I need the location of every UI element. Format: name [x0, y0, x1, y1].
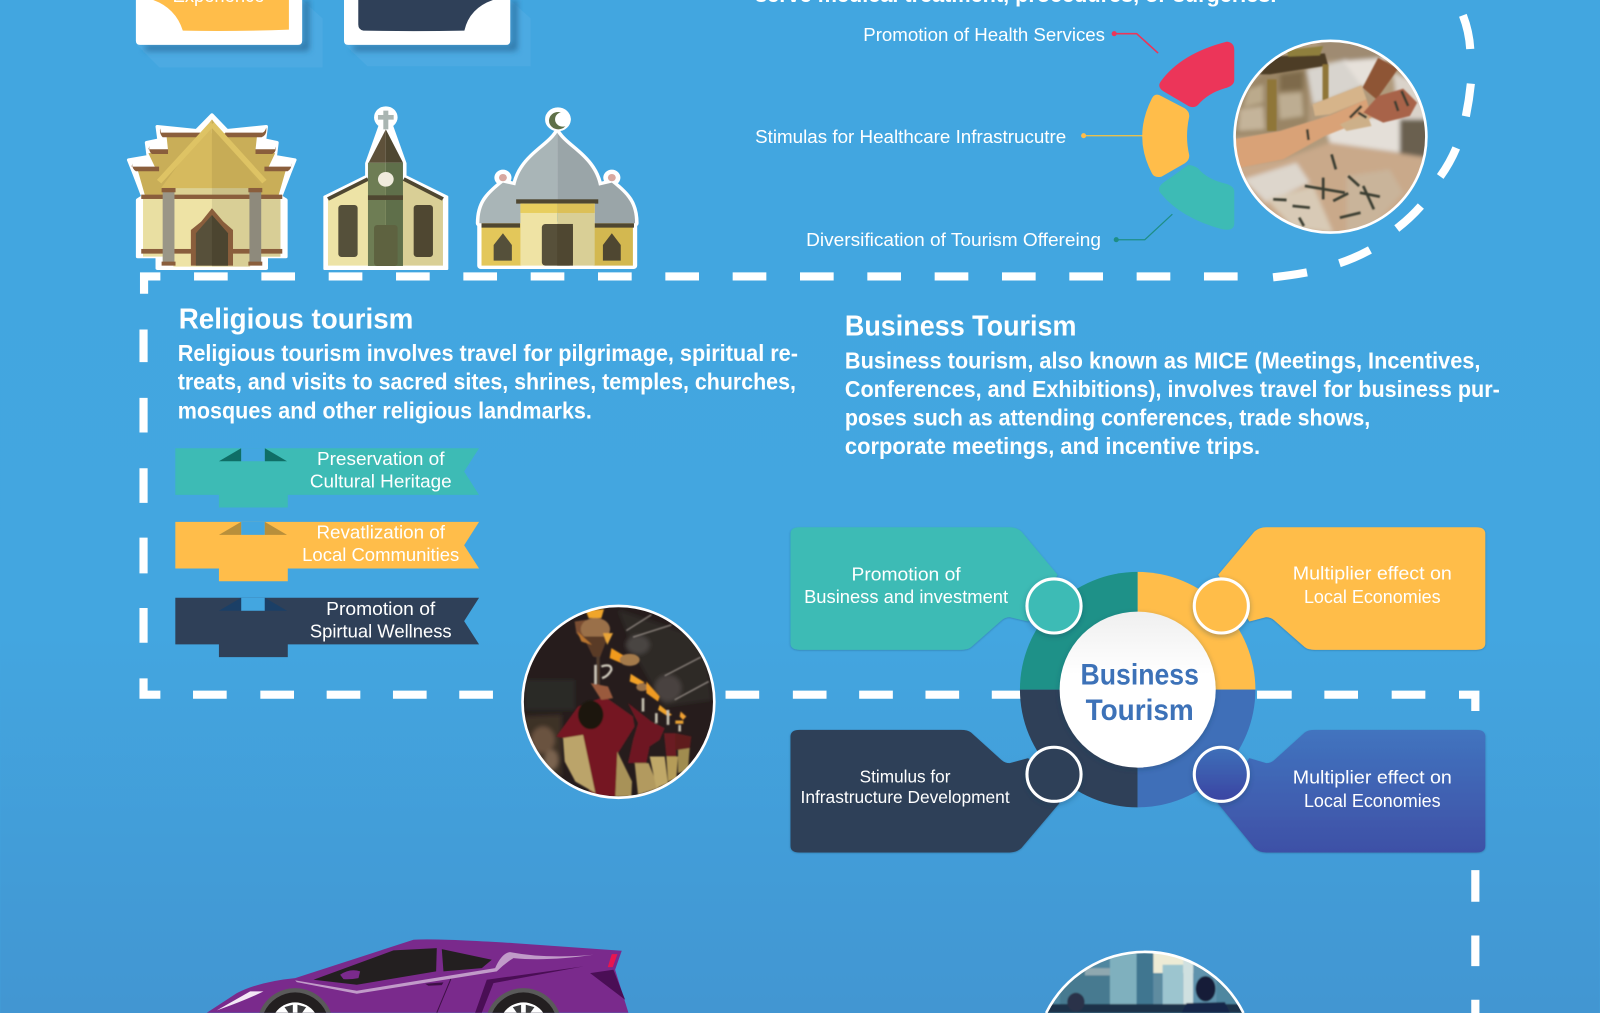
connector dots — [1027, 579, 1248, 801]
centre circle: Tourism — [1086, 694, 1194, 727]
heading: religious tourism: Religious tourism — [179, 303, 413, 335]
text: religious tourism description: mosques and other religious landmarks. — [178, 397, 592, 423]
icon: purple sports car — [207, 939, 628, 1013]
ribbon: preservation of cultural heritage: Cultural Heritage — [310, 471, 452, 492]
panel: health tourism benefits — [755, 24, 1433, 250]
icons: religious buildings — [129, 106, 635, 269]
photo: spa treatment — [1233, 40, 1428, 234]
ribbon: revitalization of local communities: Revatlization of — [316, 522, 446, 543]
text: business tourism description: Business tourism, also known as MICE (Meetings, Incentives, — [845, 347, 1480, 373]
label: stimulus for infrastructure: Stimulus for — [860, 766, 951, 786]
card: experience — [136, 0, 323, 67]
ribbon: preservation of cultural heritage — [175, 448, 479, 508]
label: multiplier effect bottom: Local Economies — [1304, 790, 1441, 811]
icon: mosque — [479, 111, 635, 266]
label: diversification: Diversification of Tourism Offereing — [806, 229, 1101, 250]
icon: temple — [129, 115, 295, 268]
text: business tourism description: corporate meetings, and incentive trips. — [845, 433, 1260, 459]
panel: business tourism — [790, 311, 1500, 852]
panel: religious tourism — [175, 303, 798, 806]
panel: top cards — [136, 0, 531, 67]
tabs — [790, 527, 1485, 852]
label: promotion of health services: Promotion of Health Services — [863, 24, 1105, 45]
text: business tourism description: poses such as attending conferences, trade shows, — [845, 404, 1370, 430]
photo: ganga aarti ceremony — [521, 604, 716, 800]
card: dark — [344, 0, 531, 66]
label: stimulus for infrastructure: Infrastructure Development — [801, 787, 1010, 807]
heading: business tourism: Business Tourism — [845, 311, 1076, 343]
ribbon: promotion of spiritual wellness — [175, 598, 479, 657]
label: multiplier effect bottom — [1293, 766, 1452, 811]
ribbon: promotion of spiritual wellness: Spirtual Wellness — [310, 621, 452, 642]
text: religious tourism description — [178, 340, 798, 423]
ribbon: promotion of spiritual wellness: Promotion of — [326, 598, 436, 619]
icon: church — [324, 106, 447, 269]
label: stimulus for infrastructure — [801, 766, 1010, 807]
ribbon: revitalization of local communities — [175, 522, 479, 581]
chart: three segment arc — [1142, 42, 1234, 230]
label: stimulus for healthcare: Stimulas for Healthcare Infrastrucutre — [755, 126, 1066, 147]
text: religious tourism description: Religious tourism involves travel for pilgrimage, spiritual re- — [178, 340, 798, 366]
label: multiplier effect bottom: Multiplier effect on — [1293, 766, 1452, 787]
label: promotion of business: Promotion of — [852, 563, 961, 584]
ring quadrants — [1020, 572, 1255, 807]
text: business tourism description: Conferences, and Exhibitions), involves travel for business pur- — [845, 376, 1500, 402]
centre circle: Business — [1081, 659, 1199, 692]
label: multiplier effect top: Multiplier effect on — [1293, 562, 1452, 583]
ribbon: revitalization of local communities: Local Communities — [302, 544, 459, 565]
chart: business tourism hub diagram — [790, 527, 1485, 852]
label: multiplier effect top: Local Economies — [1304, 586, 1441, 607]
label: promotion of business: Business and investment — [804, 586, 1009, 607]
label: promotion of business — [804, 563, 1009, 607]
photo: business people and skyline — [1040, 948, 1253, 1013]
label: diversification — [806, 214, 1172, 250]
label: multiplier effect top — [1293, 562, 1452, 607]
text: business tourism description — [845, 347, 1500, 459]
text: religious tourism description: treats, and visits to sacred sites, shrines, temples, churches, — [178, 369, 796, 395]
ribbon: preservation of cultural heritage: Preservation of — [317, 448, 445, 469]
label: promotion of health services — [863, 24, 1158, 53]
centre circle — [1060, 612, 1216, 768]
